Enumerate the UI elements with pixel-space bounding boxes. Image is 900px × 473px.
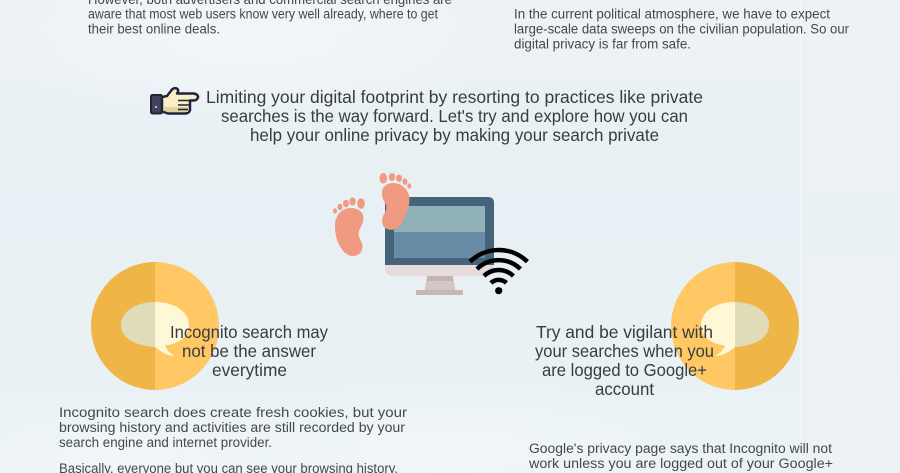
intro statement: Limiting your digital footprint by resorting to practices like private — [206, 87, 703, 107]
text block: advertisers and search engines: aware that most web users know very well already, where to get — [88, 6, 438, 22]
icon: wifi — [470, 250, 527, 294]
icon: computer monitor — [385, 197, 494, 295]
intro statement: searches is the way forward. Let's try and explore how you can — [221, 106, 688, 126]
heading: vigilant with searches: are logged to Google+ — [542, 360, 707, 380]
icon: pointing hand — [151, 88, 198, 114]
text block: advertisers and search engines — [88, 0, 452, 36]
heading: incognito search: everytime — [212, 360, 287, 380]
text block: incognito details — [59, 405, 408, 473]
icon: footprints — [333, 173, 411, 256]
heading: vigilant with searches: Try and be vigilant with — [536, 322, 713, 342]
text block: google privacy page: work unless you are logged out of your Google+ — [528, 456, 833, 471]
text block: google privacy page: Google's privacy page says that Incognito will not — [529, 441, 832, 456]
heading: incognito search: not be the answer — [182, 341, 316, 361]
heading: vigilant with searches: account — [595, 379, 654, 399]
text block: political atmosphere — [514, 6, 849, 52]
heading: incognito search — [170, 322, 328, 380]
text block: incognito details: browsing history and activities are still recorded by your — [59, 420, 406, 435]
text block: advertisers and search engines: their best online deals. — [88, 22, 220, 36]
text block: incognito details: search engine and internet provider. — [59, 435, 272, 450]
intro statement: help your online privacy by making your search private — [250, 125, 659, 145]
heading: incognito search: Incognito search may — [170, 322, 328, 342]
text block: google privacy page — [528, 441, 833, 471]
icon: right speech bubble circle — [671, 262, 799, 390]
text block: political atmosphere: In the current political atmosphere, we have to expect — [514, 6, 830, 22]
text block: political atmosphere: digital privacy is far from safe. — [514, 36, 691, 52]
text block: incognito details: Incognito search does create fresh cookies, but your — [59, 405, 408, 420]
text block: political atmosphere: large-scale data sweeps on the civilian population. So our — [514, 22, 849, 36]
icon: left speech bubble circle — [91, 262, 219, 390]
heading: vigilant with searches: your searches when you — [535, 341, 714, 361]
intro statement — [206, 87, 703, 145]
heading: vigilant with searches — [535, 322, 714, 399]
